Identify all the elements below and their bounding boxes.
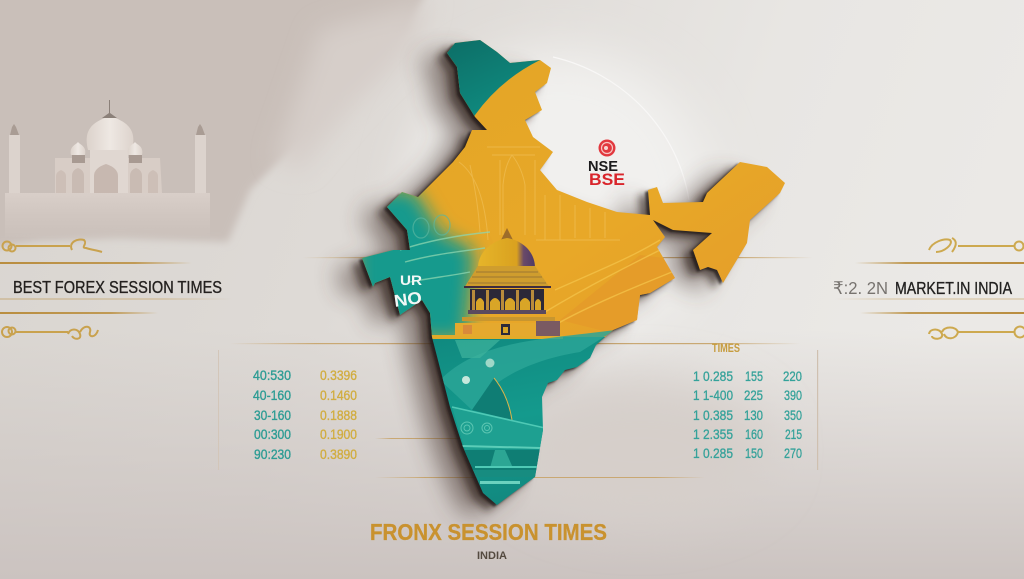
icon: Taj Mahal silhouette [5, 100, 210, 237]
band: curved ribbon [440, 330, 615, 410]
table rows: 1 0.285 [693, 368, 733, 384]
Taj main dome [87, 116, 133, 150]
column: gold values: 0.1460 [320, 387, 357, 403]
table rows: 150 [745, 445, 763, 461]
ribbon dots [462, 376, 470, 384]
table rows: 1 2.355 [693, 426, 733, 442]
decorative light bands [545, 240, 672, 325]
Taj platform [5, 193, 210, 237]
temple ribbed roof [464, 266, 550, 288]
temple plinth [468, 310, 546, 314]
table rows [693, 368, 802, 461]
column: gold values [320, 367, 357, 462]
column: teal values: 30-160 [254, 407, 291, 423]
table: left times [253, 367, 357, 462]
map shadow [336, 42, 782, 517]
region: teal west gradient [355, 190, 474, 340]
column: teal values [253, 367, 291, 462]
icon: domed temple [455, 228, 560, 336]
temple dome [478, 238, 535, 268]
table rows: 225 [744, 387, 763, 403]
column: gold values: 0.1900 [320, 426, 357, 442]
band: lower dark [465, 450, 540, 470]
decorative gold lines [0, 257, 1024, 478]
region: Kashmir teal [447, 40, 540, 116]
map: India [362, 40, 785, 505]
column: teal values: 40-160 [253, 387, 291, 403]
temple columns [470, 289, 544, 310]
table: right times [693, 343, 802, 461]
temple spire [501, 228, 513, 240]
column: gold values: 0.1888 [320, 407, 357, 423]
swirl motifs [461, 422, 492, 434]
column: teal values: 40:530 [253, 367, 291, 383]
column: teal values: 00:300 [254, 426, 291, 442]
table rows: 160 [745, 426, 763, 442]
table rows: 270 [784, 445, 802, 461]
column: teal values: 90:230 [254, 446, 291, 462]
logo NSE: NSE [588, 158, 618, 175]
subtitle: bottom: INDIA [477, 550, 507, 562]
table rows: 350 [784, 407, 802, 423]
column: gold values: 0.3890 [320, 446, 357, 462]
temple base [455, 323, 536, 336]
title: bottom: FRONX SESSION TIMES [370, 519, 607, 545]
logo emblem [598, 140, 616, 156]
Taj spire [102, 100, 117, 118]
table rows: 1 1-400 [693, 387, 733, 403]
table rows: 155 [745, 368, 763, 384]
band: mid patterned [452, 407, 545, 450]
Taj central building [55, 150, 162, 193]
table rows: 1 0.385 [693, 407, 733, 423]
heading: left: BEST FOREX SESSION TIMES [13, 277, 222, 297]
architectural line art [459, 147, 620, 240]
west band lines [400, 232, 490, 282]
heading: right: ₹:2. 2N [833, 278, 888, 298]
amber divider stripe [430, 335, 563, 339]
heading: right [833, 278, 1012, 298]
table rows: 215 [785, 426, 802, 442]
table rows: 1 0.285 [693, 445, 733, 461]
ornament: right top [929, 238, 1024, 252]
ornament: right bottom [929, 326, 1024, 339]
band: dark inset [472, 378, 512, 420]
logo: NSE BSE [588, 140, 625, 189]
region: orange east band [560, 255, 680, 335]
table heading: TIMES [712, 343, 740, 355]
logo BSE: BSE [589, 170, 625, 189]
column: gold values: 0.3396 [320, 367, 357, 383]
table rows: 390 [784, 387, 802, 403]
region: amber north and centre [350, 30, 800, 337]
table rows: 220 [783, 368, 802, 384]
table rows: 130 [744, 407, 763, 423]
map label: UR: UR [400, 272, 422, 288]
ornament: left bottom [2, 327, 98, 339]
region: teal south [432, 337, 605, 505]
Taj minarets [9, 124, 206, 193]
map label: NO: NO [393, 288, 423, 311]
halo arc behind map [553, 57, 689, 200]
ornament: left top [2, 239, 102, 252]
Taj small domes [71, 142, 142, 155]
south pattern bands [440, 330, 615, 484]
